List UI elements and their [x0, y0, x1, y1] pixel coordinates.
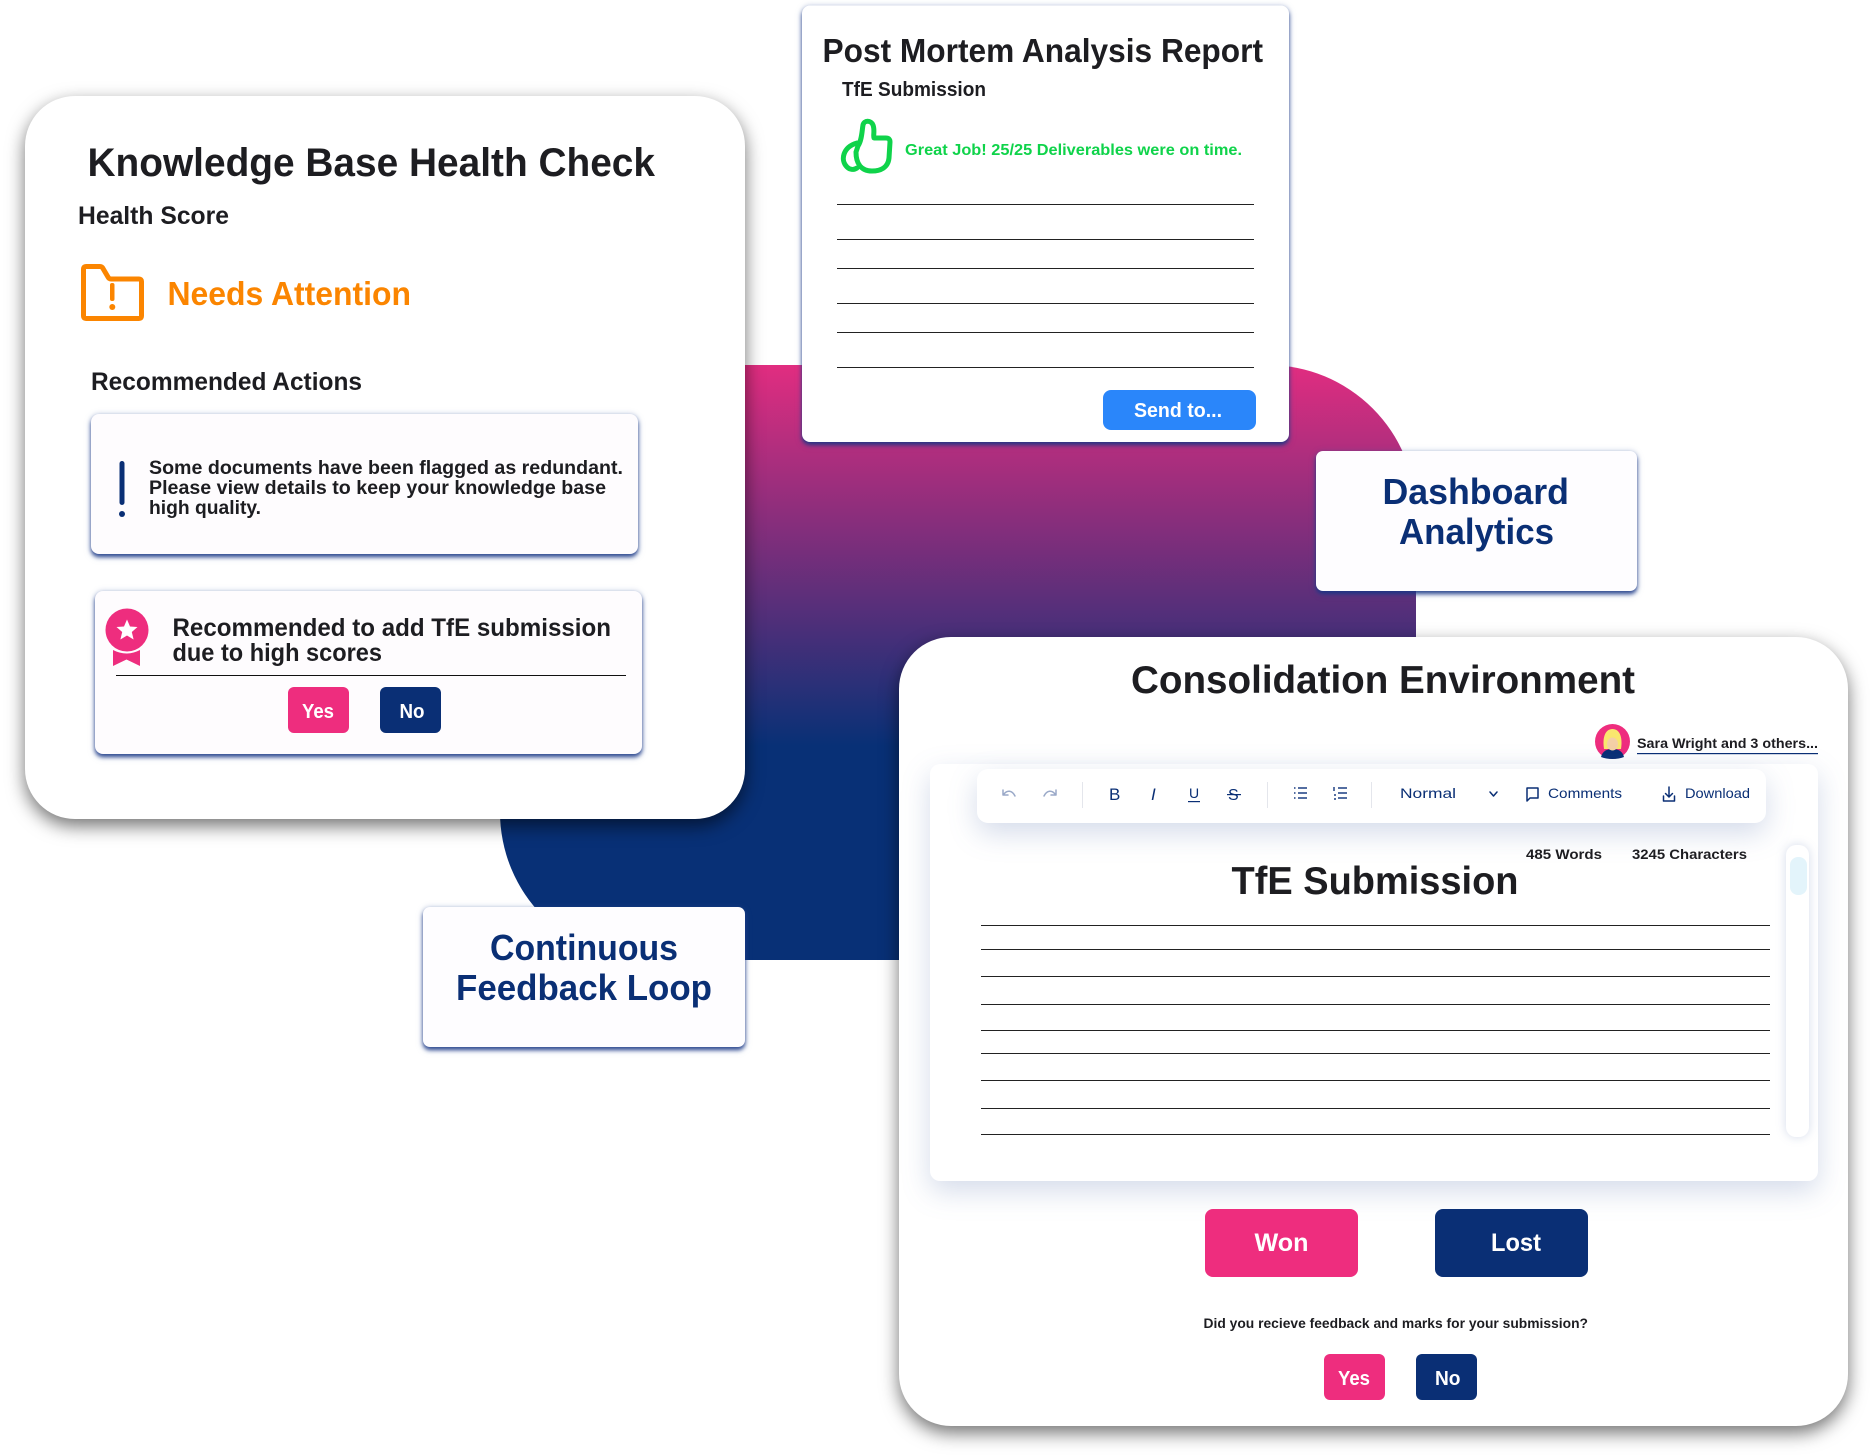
word count: 485 Words	[1526, 847, 1602, 862]
editor toolbar	[977, 769, 1766, 823]
card: TfE submission recommendation	[95, 591, 642, 754]
button: yes	[288, 687, 349, 733]
button: yes: Yes	[1338, 1368, 1370, 1390]
label card: continuous feedback loop: Feedback Loop	[456, 967, 712, 1008]
notice text	[149, 457, 623, 519]
scrollbar	[1786, 845, 1809, 1137]
background gradient blob	[500, 365, 1416, 960]
feedback question: Did you recieve feedback and marks for your submission?	[1204, 1315, 1588, 1331]
notice text: Please view details to keep your knowledge base	[149, 477, 606, 499]
dropdown: normal	[1400, 785, 1497, 801]
recommendation text: Recommended to add TfE submission	[172, 614, 611, 642]
heading: post mortem analysis report: Post Mortem Analysis Report	[822, 32, 1263, 69]
icon: numbered list	[1334, 787, 1347, 799]
button: bold: B	[1109, 785, 1120, 804]
panel: post mortem analysis report	[802, 6, 1289, 442]
button: italic: I	[1151, 785, 1156, 804]
icon: folder alert	[84, 266, 142, 318]
document title: TfE Submission	[1232, 860, 1518, 903]
heading: recommended actions: Recommended Actions	[91, 368, 362, 396]
notice text: Some documents have been flagged as redundant.	[149, 457, 623, 479]
label card: dashboard analytics: Analytics	[1399, 511, 1554, 552]
button: download: Download	[1685, 785, 1750, 801]
label card: dashboard analytics	[1316, 451, 1637, 591]
icon: redo	[1044, 790, 1056, 796]
button: no: No	[1435, 1368, 1460, 1390]
dropdown: normal: Normal	[1400, 785, 1456, 801]
icon: exclamation mark	[119, 461, 125, 517]
button: lost: Lost	[1491, 1229, 1542, 1257]
button: no	[380, 687, 441, 733]
label: health score: Health Score	[78, 202, 229, 230]
button: no	[1416, 1354, 1477, 1400]
recommendation text: due to high scores	[172, 639, 382, 667]
collaborators link: Sara Wright and 3 others...	[1637, 736, 1818, 751]
heading: consolidation environment: Consolidation Environment	[1131, 659, 1635, 702]
icon: bullet list	[1294, 788, 1307, 798]
button: no: No	[400, 701, 424, 723]
notice text: high quality.	[149, 497, 261, 519]
button: won	[1205, 1209, 1358, 1277]
icon: medal	[106, 608, 148, 666]
icon: undo	[1003, 790, 1015, 796]
button: lost	[1435, 1209, 1588, 1277]
status: needs attention: Needs Attention	[168, 275, 411, 312]
avatar: Sara Wright	[1595, 724, 1630, 759]
heading: knowledge base health check: Knowledge Base Health Check	[88, 141, 656, 185]
recommendation text	[172, 614, 611, 667]
panel: consolidation environment	[899, 637, 1848, 1426]
subheading: TfE submission: TfE Submission	[842, 79, 986, 101]
button: won: Won	[1254, 1229, 1308, 1257]
label card: dashboard analytics: Dashboard	[1382, 471, 1569, 512]
button: yes	[1324, 1354, 1385, 1400]
button: comments: Comments	[1548, 785, 1622, 801]
button: send to: Send to...	[1134, 400, 1222, 422]
label card: continuous feedback loop	[423, 907, 745, 1047]
editor panel	[930, 764, 1818, 1181]
button: strikethrough: S	[1228, 787, 1239, 804]
button: send to	[1103, 390, 1256, 430]
status: deliverables on time: Great Job! 25/25 Deliverables were on time.	[905, 142, 1242, 159]
icon: thumbs up	[843, 121, 890, 171]
button: underline: U	[1189, 785, 1199, 801]
label card: continuous feedback loop: Continuous	[490, 927, 678, 968]
card: redundant documents notice	[91, 414, 638, 554]
panel: knowledge base health check	[25, 96, 745, 819]
button: yes: Yes	[302, 701, 334, 723]
character count: 3245 Characters	[1632, 847, 1747, 862]
